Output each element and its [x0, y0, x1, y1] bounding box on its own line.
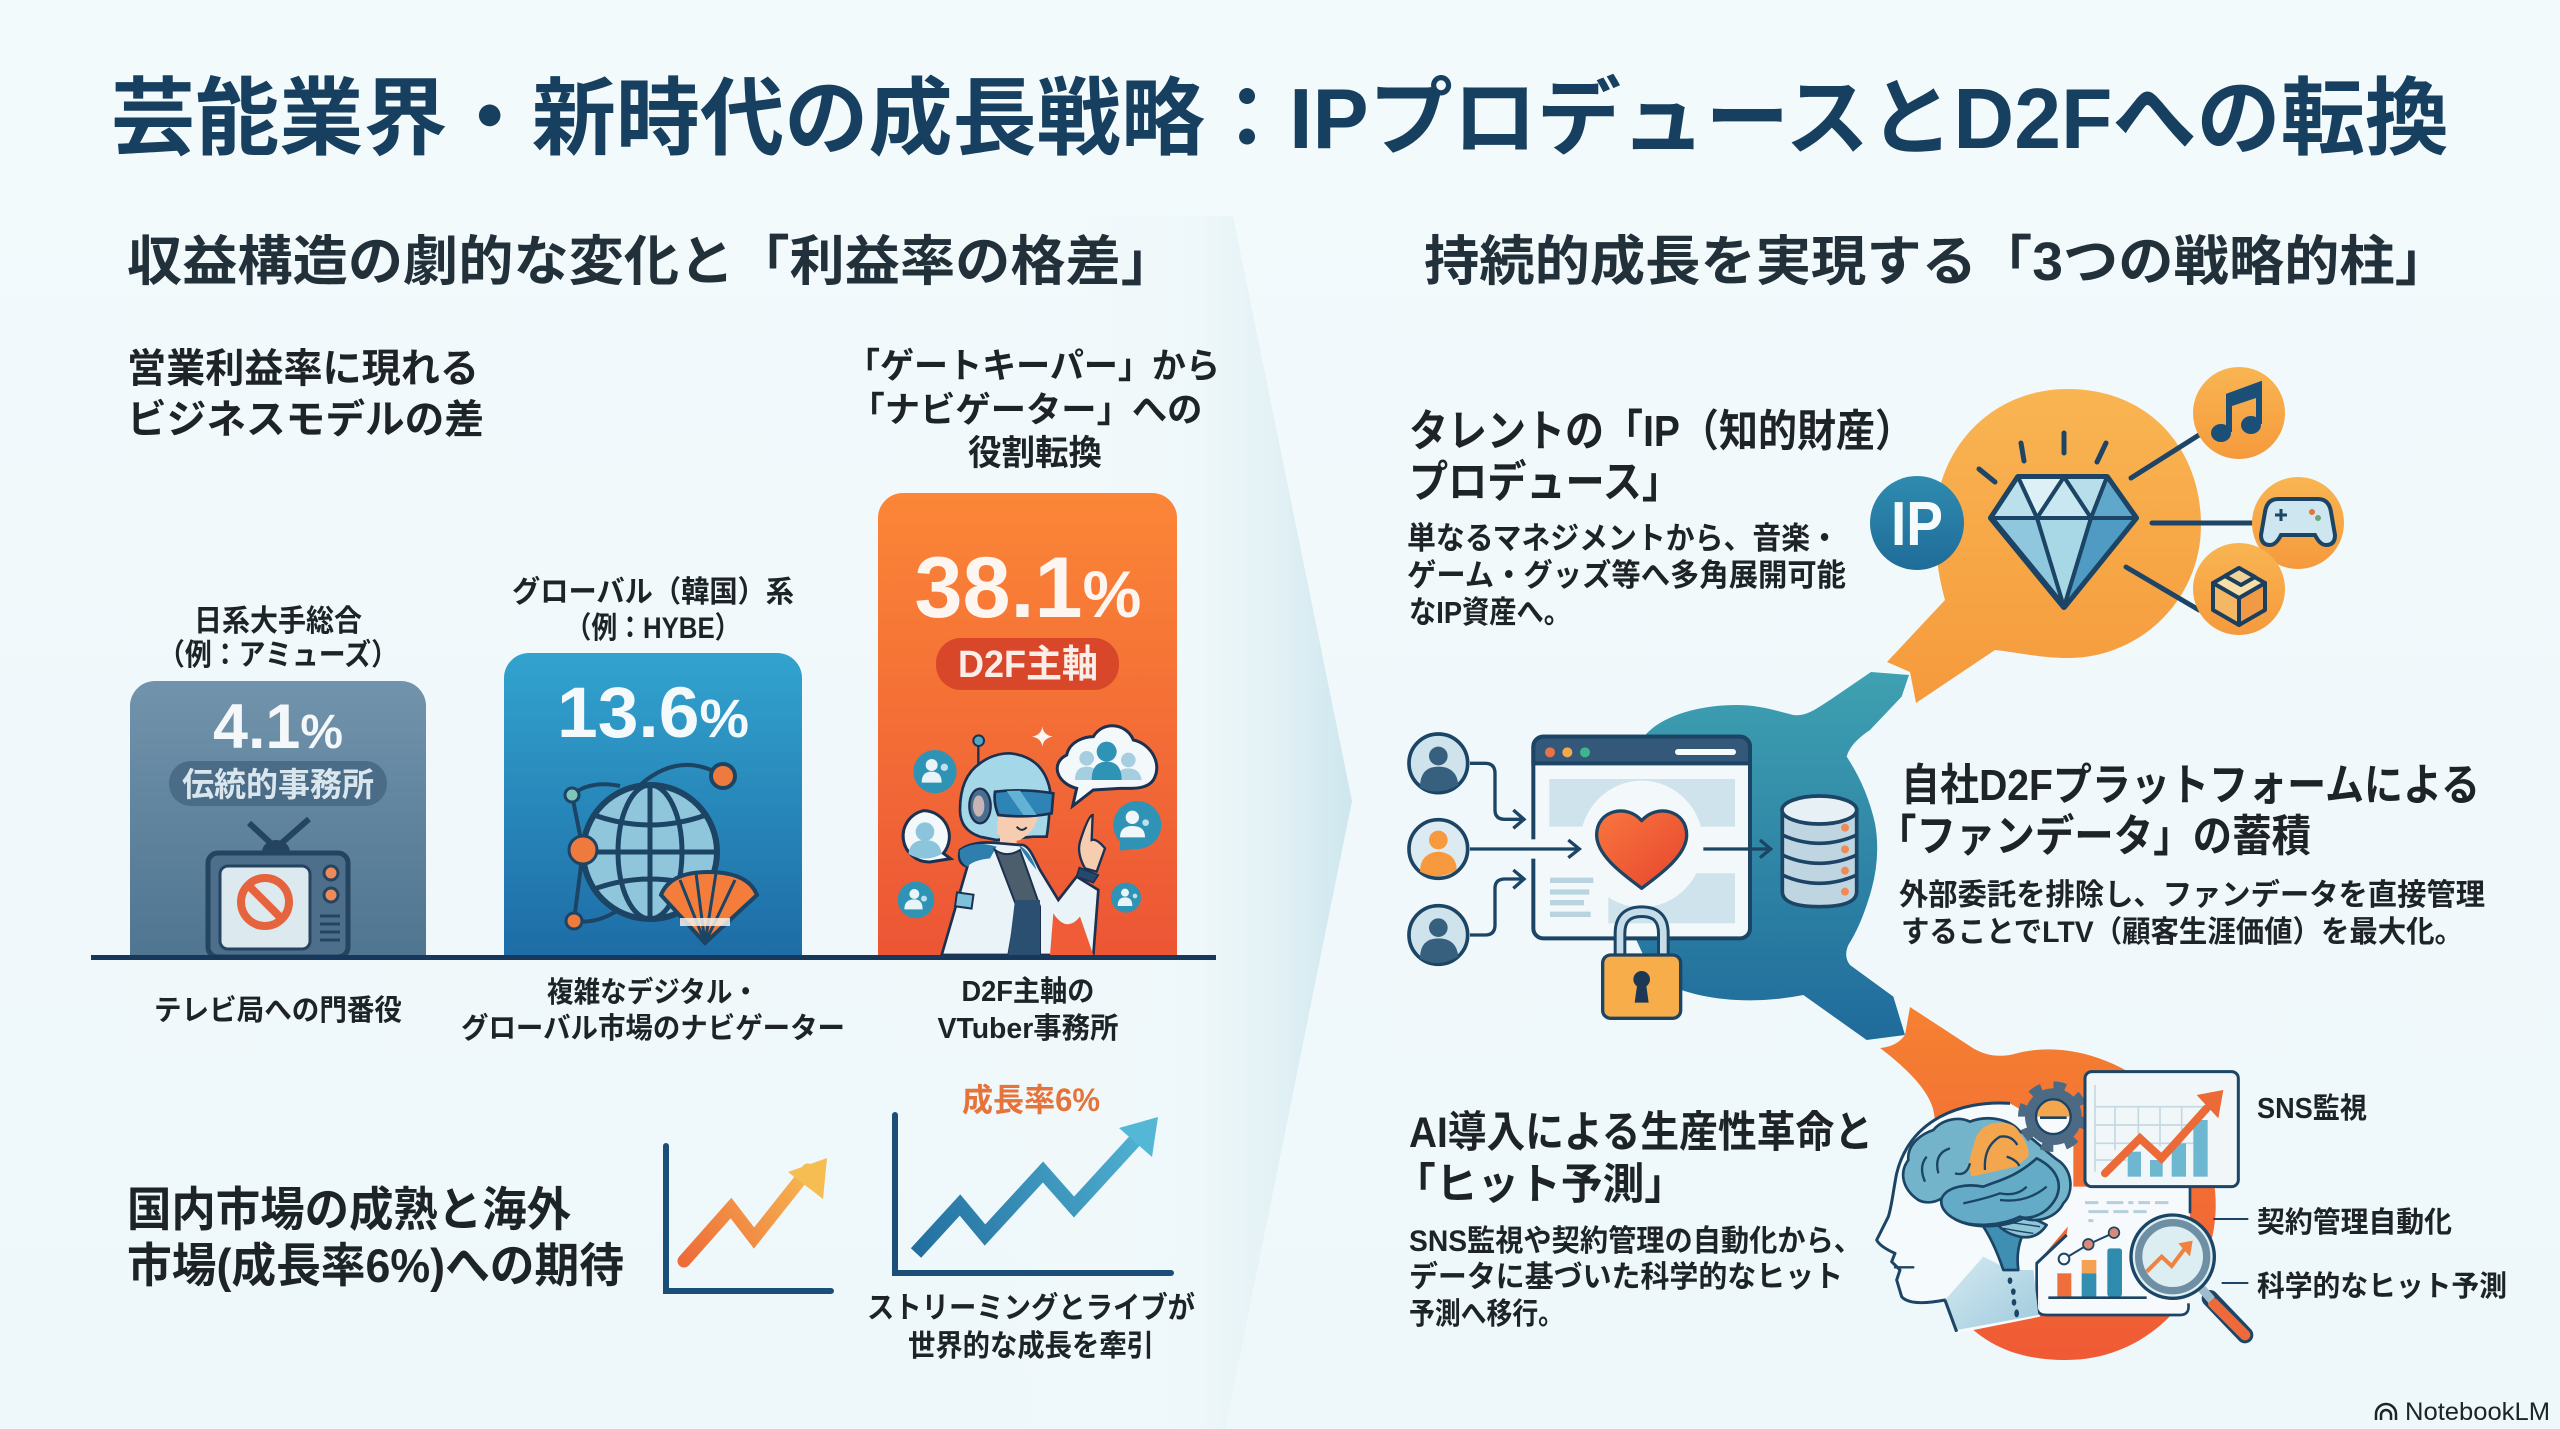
icon: television with no sign	[208, 819, 348, 957]
bar chart: operating margin	[91, 493, 1216, 960]
pill: D2F	[936, 638, 1119, 690]
head silhouette	[1877, 1103, 2073, 1333]
pillar 2 text: 自社D2Fプラットフォームによる	[1901, 761, 2480, 810]
pillar 1 graphic: IP	[1870, 367, 2344, 703]
pill: D2F: D2F主軸	[958, 644, 1098, 686]
browser window	[1527, 737, 1750, 938]
text: domestic maturity and overseas expectation: 国内市場の成熟と海外	[127, 1183, 571, 1236]
icon: package box	[2193, 543, 2285, 635]
badge: IP: IP	[1891, 490, 1943, 559]
pillar 1 text: 単なるマネジメントから、音楽・	[1407, 521, 1839, 556]
heading: right section: 持続的成長を実現する「3つの戦略的柱」	[1424, 232, 2450, 292]
pill: traditional agency: 伝統的事務所	[182, 766, 374, 803]
subheading: role shift: 「ナビゲーター」への	[850, 391, 1202, 430]
pillar 3 text: データに基づいた科学的なヒット	[1409, 1260, 1843, 1294]
pillar 2 text: 「ファンデータ」の蓄積	[1877, 812, 2311, 861]
badge: IP	[1870, 476, 1964, 570]
pillar 2 text: 外部委託を排除し、ファンデータを直接管理	[1899, 878, 2485, 912]
subheading: role shift: 「ゲートキーパー」から	[846, 347, 1220, 386]
icon: brain	[1903, 1118, 2070, 1270]
icon: database	[1782, 796, 1857, 907]
bar 1: traditional agency	[130, 681, 426, 957]
pillar 3 callout labels: 科学的なヒット予測	[2257, 1270, 2507, 1303]
trend panel	[2085, 1072, 2238, 1187]
pillar 1 text: ゲーム・グッズ等へ多角展開可能	[1407, 558, 1846, 593]
subheading: role shift: 役割転換	[968, 434, 1102, 473]
pillar 3 callout labels: 契約管理自動化	[2257, 1206, 2452, 1239]
pillar 1 text	[1407, 407, 1914, 630]
icon: music	[2193, 367, 2285, 459]
title: 芸能業界・新時代の成長戦略：IPプロデュースとD2Fへの転換	[111, 72, 2449, 167]
bar 2: global Korean	[504, 653, 802, 957]
bar 3: D2F VTuber	[878, 493, 1177, 957]
chevron panel: left section	[0, 216, 1352, 1429]
pillar 3 callout labels	[2257, 1092, 2507, 1303]
labels above bars: グローバル（韓国）系	[512, 576, 794, 609]
labels below bars: テレビ局への門番役	[154, 994, 402, 1027]
pillar 3 text: AI導入による生産性革命と	[1409, 1109, 1873, 1157]
icon: heart	[1597, 811, 1687, 888]
icon: users	[1409, 734, 1468, 964]
document	[2037, 1187, 2190, 1315]
pillar 3 graphic: AI	[1877, 1007, 2248, 1360]
pillar 2 graphic: D2F platform	[1409, 672, 1909, 1040]
icon: padlock	[1603, 912, 1681, 1018]
icon: magnifier	[2131, 1215, 2245, 1335]
leader lines	[2213, 1219, 2248, 1283]
caption: streaming and live: 世界的な成長を牽引	[908, 1330, 1154, 1363]
icon: gear	[2023, 1086, 2084, 1147]
value 13.6%: 13.6%	[557, 674, 749, 753]
labels below bars: D2F主軸の	[962, 975, 1094, 1008]
orange blob	[1880, 1007, 2216, 1360]
labels below bars	[154, 975, 1118, 1045]
subheading: business model gap	[127, 347, 484, 442]
value 38.1%: 38.1%	[914, 540, 1142, 636]
caption: streaming and live	[867, 1291, 1195, 1363]
subheading: business model gap: ビジネスモデルの差	[127, 397, 484, 442]
teal blob	[1587, 672, 1909, 1040]
labels above bars: 日系大手総合	[194, 605, 362, 638]
heading: left section: 収益構造の劇的な変化と「利益率の格差」	[127, 232, 1176, 292]
icon: diamond	[1991, 477, 2136, 607]
watermark: NotebookLM: NotebookLM	[2405, 1398, 2550, 1426]
subheading: role shift	[846, 347, 1220, 473]
labels below bars: グローバル市場のナビゲーター	[461, 1012, 845, 1045]
labels above bars: （例：HYBE）	[566, 612, 740, 645]
caption: streaming and live: ストリーミングとライブが	[867, 1291, 1195, 1325]
connector lines and rays	[1979, 433, 2252, 610]
chart: overseas large arrow	[895, 1115, 1171, 1273]
pillar 1 text: なIP資産へ。	[1409, 595, 1571, 630]
pillar 3 text	[1394, 1109, 1873, 1331]
pillar 3 text: 「ヒット予測」	[1394, 1161, 1686, 1209]
pillar 3 text: 予測へ移行。	[1409, 1298, 1564, 1331]
pillar 1 text: タレントの「IP（知的財産）	[1409, 407, 1914, 456]
labels above bars	[158, 576, 794, 672]
pillar 2 text: することでLTV（顧客生涯価値）を最大化。	[1901, 916, 2463, 949]
labels above bars: （例：アミューズ）	[158, 638, 398, 672]
pillar 3 text: SNS監視や契約管理の自動化から、	[1409, 1225, 1862, 1258]
pillar 1 text: プロデュース」	[1409, 458, 1681, 507]
flow arrows	[1470, 763, 1771, 935]
pillar 2 text	[1877, 761, 2485, 949]
pillar 3 callout labels: SNS監視	[2257, 1092, 2367, 1125]
neck	[1945, 1235, 2067, 1332]
labels below bars: 複雑なデジタル・	[547, 975, 759, 1009]
label: growth 6%: 成長率6%	[962, 1082, 1100, 1118]
icon: game controller	[2252, 477, 2344, 569]
icon: globe with fan	[565, 764, 757, 943]
baseline axis	[91, 955, 1216, 960]
orange speech blob	[1887, 389, 2201, 703]
subheading: business model gap: 営業利益率に現れる	[127, 347, 479, 391]
text: domestic maturity and overseas expectation: 市場(成長率6%)への期待	[127, 1239, 624, 1292]
labels below bars: VTuber事務所	[938, 1012, 1118, 1045]
icon: VTuber with fans	[898, 726, 1161, 955]
value 4.1%: 4.1%	[213, 692, 343, 762]
chart: domestic small arrow	[666, 1146, 831, 1291]
text: domestic maturity and overseas expectation	[127, 1183, 624, 1292]
